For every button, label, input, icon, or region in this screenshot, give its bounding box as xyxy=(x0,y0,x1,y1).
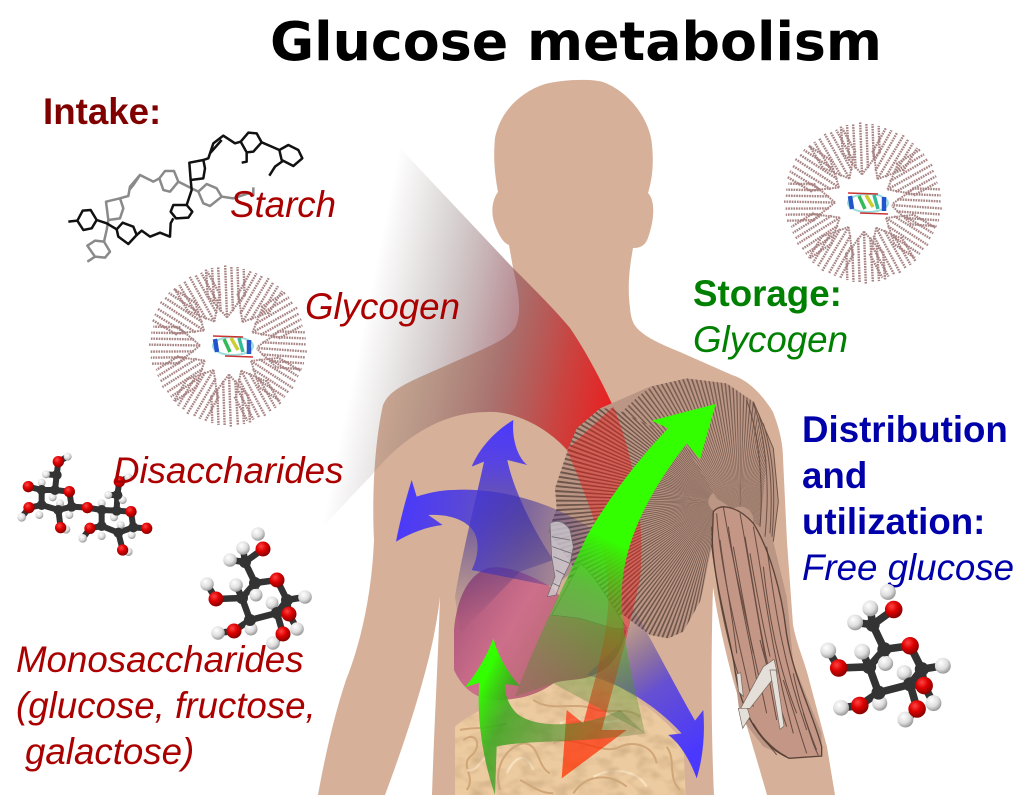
wrist tendons xyxy=(737,659,784,729)
shoulder muscle fibres xyxy=(622,378,766,526)
heading: intake: Intake: xyxy=(43,91,161,132)
label: storage: Storage: xyxy=(693,273,842,314)
green arrow: to liver xyxy=(465,638,645,795)
label: starch: Starch xyxy=(230,184,336,225)
molecule: disaccharide xyxy=(17,453,152,556)
upper arm fibres xyxy=(747,400,778,542)
label: distribution and utilization: Distribution xyxy=(802,409,1008,450)
chest muscle fibres xyxy=(628,412,808,592)
diaphragm fibres xyxy=(552,563,627,628)
label: monosaccharides: galactose) xyxy=(25,731,194,772)
label: monosaccharides: Monosaccharides xyxy=(16,639,304,680)
title: Glucose metabolism xyxy=(270,10,882,73)
blue arrow: lower right xyxy=(587,593,704,778)
intestines xyxy=(455,677,686,795)
liver xyxy=(454,567,627,700)
molecule: free glucose xyxy=(820,584,951,727)
molecule: monosaccharide xyxy=(200,527,312,650)
arm and chest muscles xyxy=(547,373,827,763)
label: distribution and utilization: and xyxy=(802,455,867,496)
label: disaccharides: Disaccharides xyxy=(113,450,343,491)
label: distribution and utilization: Free glucose xyxy=(802,547,1014,588)
molecule: glycogen (storage) xyxy=(784,122,943,284)
molecule: glycogen (intake) xyxy=(149,265,308,427)
rib cage fragment xyxy=(547,521,573,597)
molecule: starch xyxy=(68,133,302,262)
label: storage: Glycogen xyxy=(693,319,848,360)
green arrow: to muscle xyxy=(515,404,716,733)
label: monosaccharides: (glucose, fructose, xyxy=(16,685,316,726)
label: distribution and utilization: utilization: xyxy=(802,501,985,542)
blue arrow: left xyxy=(396,480,610,587)
forearm xyxy=(712,507,822,758)
blue arrow: up xyxy=(455,420,553,633)
inner anatomy and pathway artwork, drawn in 3x scaled coordinates xyxy=(300,148,827,795)
red arrow: downward xyxy=(562,407,641,778)
body silhouette xyxy=(318,80,835,795)
label: glycogen (intake): Glycogen xyxy=(305,286,460,327)
starch-to-sugar funnel xyxy=(300,148,612,532)
